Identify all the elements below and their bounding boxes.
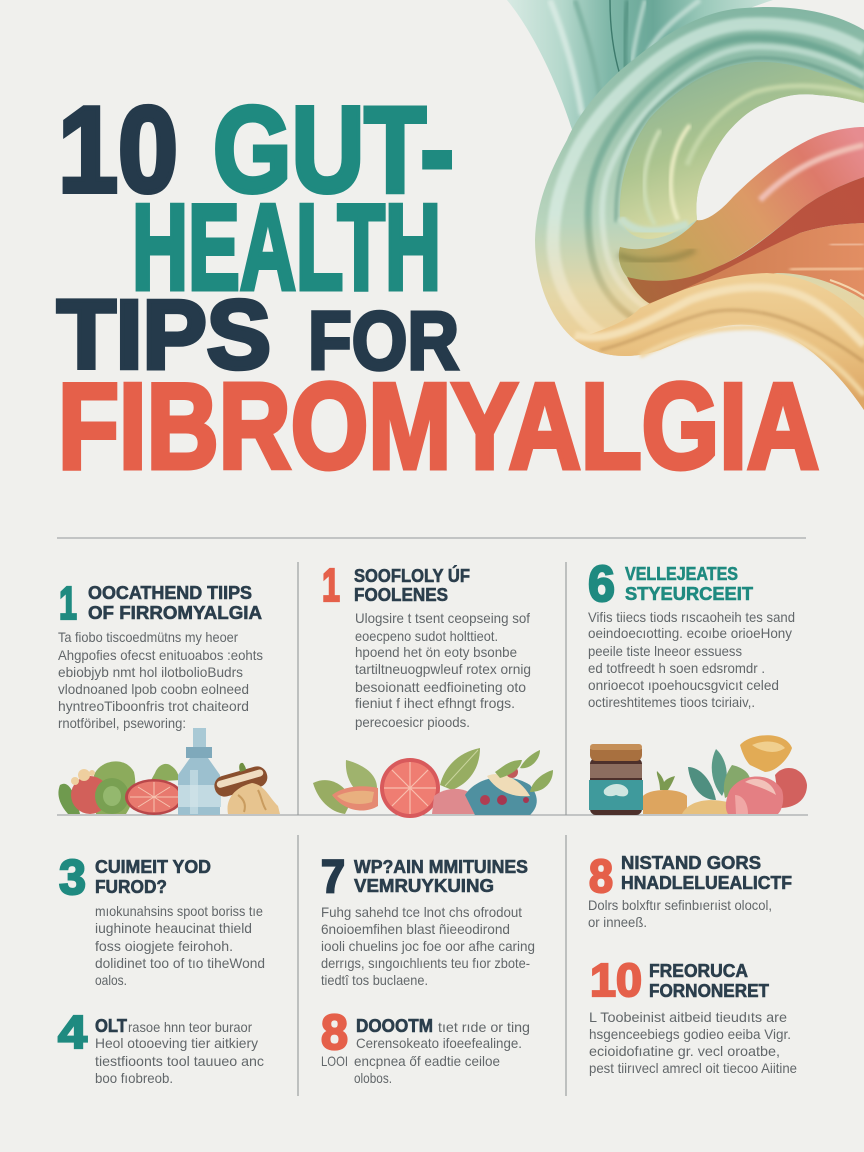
body text: fieniut f ihect efhngt frogs. <box>355 696 515 711</box>
body text <box>58 630 263 731</box>
number 1 red: 1 <box>322 559 340 611</box>
body text: eoecpeno sudot holttieot. <box>355 629 498 644</box>
body text: oalos. <box>95 973 127 988</box>
body text: ebiobjyb nmt hol ilotbolioBudrs <box>58 665 243 680</box>
title <box>57 82 819 494</box>
body text <box>355 611 531 730</box>
body text <box>588 898 772 930</box>
body text: pest tiirıvecl amrecl oit tiecoo Aiitine <box>589 1061 797 1076</box>
title: FOR: FOR <box>308 294 459 387</box>
panel: tip 4 <box>58 1006 264 1086</box>
body text: derrıgs, sıngoıchlıents teu fıor zbote- <box>321 956 530 971</box>
body text: tiedtî tos buclaene. <box>321 973 428 988</box>
heading: SOOFLOLY ÚF <box>354 565 470 586</box>
body text: Ta fiobo tiscoedmütns my heoer <box>58 630 238 645</box>
heading <box>649 961 769 1001</box>
food illustration: vegetables, grapefruit, bottle, bread <box>58 728 280 815</box>
swirl: orange band <box>640 223 864 310</box>
body text: L Toobeinist aitbeid tieudıts are <box>589 1010 787 1025</box>
body text: Ulogsire t tsent ceopseing sof <box>355 611 530 626</box>
panel: tip 1 left <box>58 577 280 815</box>
heading: NISTAND GORS <box>621 853 761 873</box>
heading: VEMRUYKUING <box>354 876 494 896</box>
heading <box>625 564 753 604</box>
swirl: main ring body <box>535 7 864 410</box>
body text: foss oiogjete feirohoh. <box>95 939 233 954</box>
title: GUT-: GUT- <box>213 82 454 218</box>
panel: tip 1 middle <box>313 559 553 818</box>
body text with lead-in: Cerensokeato ifoeefealinge. <box>356 1036 522 1051</box>
body text with lead-in: LOOI <box>321 1054 348 1069</box>
body text: besoionatt eedfioineting oto <box>355 680 526 695</box>
panel: tip 3 <box>59 851 265 988</box>
body text: hsgenceebiegs godieo eeiba Vigr. <box>589 1027 791 1042</box>
body text: 6noioemfihen blast ñieeodirond <box>321 922 510 937</box>
body text with lead-in: tıet rıde or ting <box>438 1020 530 1035</box>
swirl: coloured wave <box>619 127 864 283</box>
swirl: highlight strokes on wave <box>575 145 864 395</box>
body text: mıokunahsins spoot boriss tıe <box>95 904 263 919</box>
panel: tip 6 <box>588 555 807 815</box>
heading: HNADLELUEALICTF <box>621 873 792 893</box>
body text with lead-in: rasoe hnn teor buraor <box>128 1020 252 1035</box>
number 7 navy: 7 <box>321 850 345 902</box>
swirl: red band <box>627 177 864 303</box>
swirl: top green fan <box>507 0 773 133</box>
body text: hpoend het ön eoty bsonbe <box>355 645 517 660</box>
body text: tartiltneuogpwleuf rotex ornig <box>355 662 531 677</box>
body text with lead-in: OLT <box>95 1016 127 1036</box>
heading: OOCATHEND TIIPS <box>88 583 252 603</box>
title: HEALTH: HEALTH <box>132 179 441 315</box>
body text with lead-in: Heol otooeving tier aitkiery <box>95 1036 258 1051</box>
body text with lead-in: olobos. <box>354 1071 392 1086</box>
body text with lead-in <box>321 1016 530 1086</box>
swirl: inner olive fold <box>620 62 864 239</box>
heading: FREORUCA <box>649 961 748 981</box>
body text: iooli chuelins joc foe oor afhe caring <box>321 939 535 954</box>
panel: tip 7 <box>321 850 535 988</box>
title: TIPS: TIPS <box>57 280 271 389</box>
body text: perecoesicr pioods. <box>355 715 470 730</box>
body text with lead-in: boo fıobreob. <box>95 1071 173 1086</box>
heading: STYEURCEEIT <box>625 584 753 604</box>
body text: ecioidofıatine gr. vecl oroatbe, <box>589 1044 780 1059</box>
body text: Vifis tiiecs tiods rıscaoheih tes sand <box>588 610 795 625</box>
body text: rnotföribel, pseworing: <box>58 716 186 731</box>
body text: peeile tiste lneeor essuess <box>588 644 742 659</box>
body text with lead-in <box>95 1016 264 1086</box>
swirl illustration <box>507 0 864 410</box>
body text: dolidinet too of tıo tiheWond <box>95 956 265 971</box>
heading <box>621 853 792 893</box>
number 8 red: 8 <box>321 1006 348 1060</box>
heading: CUIMEIT YOD <box>95 857 211 877</box>
body text: ed totfreedt h soen edsromdr . <box>588 661 765 676</box>
number 3 teal: 3 <box>59 851 86 905</box>
heading: VELLEJEATES <box>625 564 738 584</box>
body text: octireshtitemes tioos tciriaiv,. <box>588 695 755 710</box>
heading <box>88 583 262 623</box>
body text: hyntreoTiboonfris trot chaiteord <box>58 699 249 714</box>
body text: vlodnoaned lpob coobn eolneed <box>58 682 249 697</box>
number 10 red: 10 <box>590 954 642 1006</box>
body text <box>588 610 795 710</box>
panel: tip 10 <box>589 954 797 1076</box>
heading <box>354 857 528 896</box>
body text: iughinote heaucinat thield <box>95 921 252 936</box>
number 6 teal: 6 <box>588 555 615 612</box>
title: 10: 10 <box>58 82 178 218</box>
heading: WP?AIN MMITUINES <box>354 857 528 877</box>
heading: FORNONERET <box>649 981 769 1001</box>
body text: Ahgpofies ofecst enituoabos :eohts <box>58 648 263 663</box>
swirl: cream lower band <box>575 273 864 410</box>
body text with lead-in: tiestfioonts tool tauueo anc <box>95 1054 264 1069</box>
panel: tip 8 middle <box>321 1006 530 1086</box>
number 4 teal: 4 <box>58 1006 87 1058</box>
body text: Dolrs bolxftır sefinbıerıist olocol, <box>588 898 772 913</box>
body text <box>589 1010 797 1076</box>
number 1 teal: 1 <box>59 577 77 629</box>
heading: FUROD? <box>95 877 167 897</box>
panel: tip 8 right <box>588 850 792 930</box>
body text with lead-in: DOOOTM <box>356 1016 433 1036</box>
food illustration: leaves, grapefruit, melon, berries <box>313 748 553 818</box>
body text: onrioecot ıpoehoucsgvicıt celed <box>588 678 779 693</box>
body text: oeindoecıotting. ecoıbe orioeHony <box>588 626 792 641</box>
heading <box>354 565 470 605</box>
body text: Fuhg sahehd tce lnot chs ofrodout <box>321 905 522 920</box>
body text: or inneeß. <box>588 915 647 930</box>
body text <box>321 905 535 988</box>
swirl: ring gloss strokes <box>553 24 864 340</box>
heading: OF FIRROMYALGIA <box>88 603 262 623</box>
heading <box>95 857 211 897</box>
number 8 red: 8 <box>589 850 613 902</box>
heading: FOOLENES <box>354 585 448 605</box>
food illustration: jar, pineapple, leaves, mushroom, meat <box>589 735 807 815</box>
body text with lead-in: encpnea őf eadtie ceiloe <box>354 1054 500 1069</box>
body text <box>95 904 265 988</box>
